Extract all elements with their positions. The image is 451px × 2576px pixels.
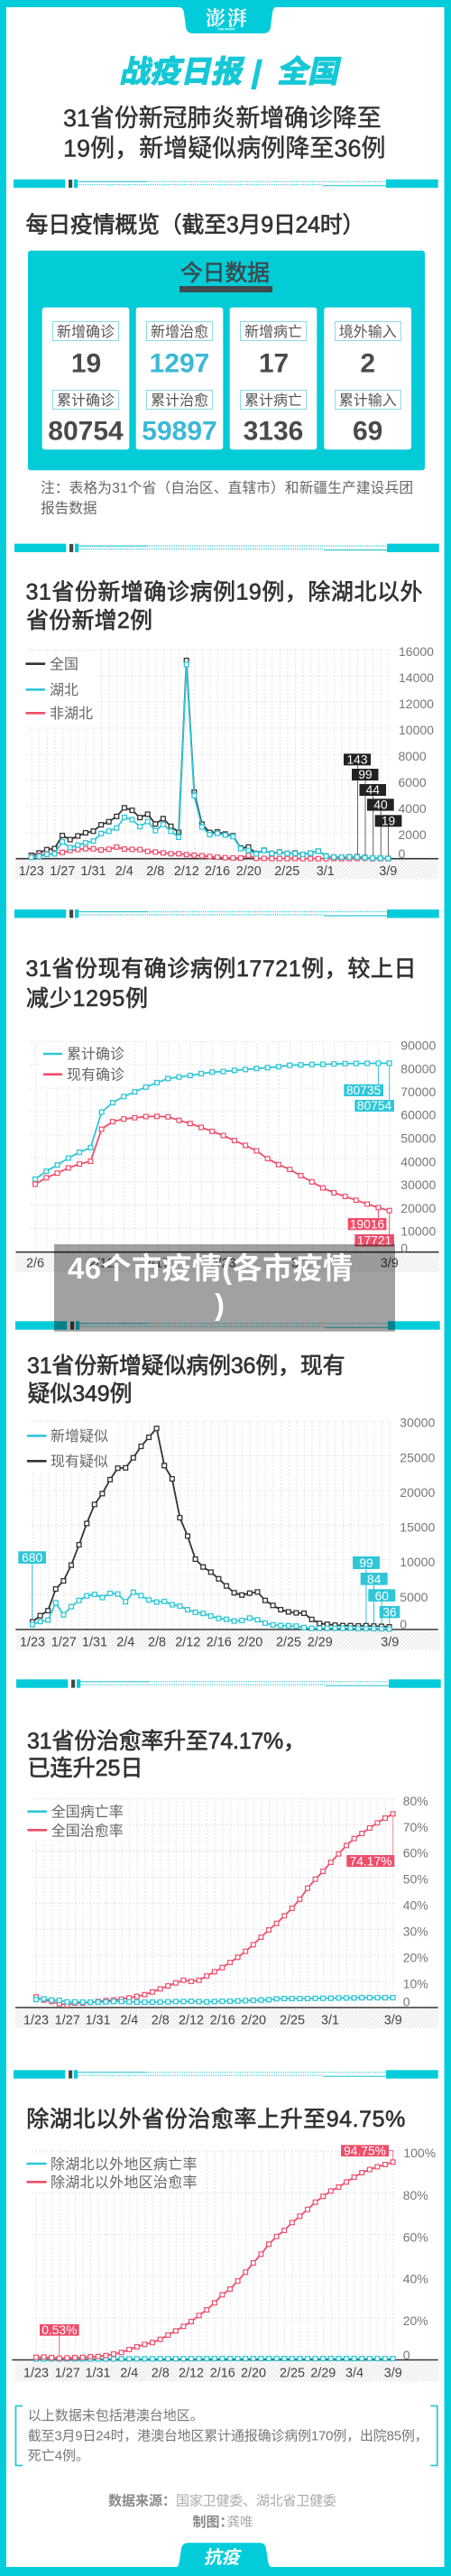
card: confirmed: 19 [71,348,101,379]
y axis labels: 70000 [400,1085,436,1099]
y axis labels: 25000 [400,1451,435,1465]
heading: suspected [27,1353,345,1407]
value tags [18,1551,400,1620]
y axis labels: 20% [403,2313,428,2328]
value tags [344,752,401,828]
value tags: 36 [382,1606,397,1620]
legend: 除湖北以外地区病亡率 [51,2156,197,2173]
card: deaths: 累计病亡 [244,392,302,409]
x axis labels: 2/29 [308,1635,333,1649]
legend: 除湖北以外地区治愈率 [51,2174,197,2191]
y axis labels: 14000 [399,670,434,685]
x axis labels [26,1256,399,1270]
chart: national recovery rate [15,1794,438,2028]
source credits: 龚唯 [227,2515,253,2530]
card: imported: 69 [353,416,382,446]
value tags: 94.75% [344,2144,386,2158]
leader line [392,1814,394,1855]
x axis labels [23,2366,402,2380]
subtitle [63,105,386,162]
bracketed note: 以上数据未包括港澳台地区。 [28,2408,204,2424]
heading: recovery rate: 已连升25日 [27,1756,143,1781]
x axis labels: 1/27 [50,864,75,879]
y axis labels [400,1416,435,1631]
heading: existing confirmed [25,956,417,1011]
heading: recovery rate: 31省份治愈率升至74.17%， [27,1729,306,1754]
card: imported: 累计输入 [339,392,397,409]
leader lines [60,2151,393,2359]
value tags: 44 [366,783,380,797]
x axis labels: 2/16 [207,1635,232,1649]
y axis labels: 5000 [400,1590,428,1604]
x axis labels: 1/27 [55,2014,80,2028]
heading: existing confirmed: 31省份现有确诊病例17721例，较上日 [25,956,417,982]
y axis labels: 0 [400,1617,407,1631]
y axis labels: 8000 [399,749,427,763]
divider [14,544,439,552]
x axis labels: 2/20 [236,864,262,879]
y axis labels: 0 [400,1241,408,1255]
y axis labels: 20% [403,1951,428,1965]
x axis labels: 2/12 [179,2014,204,2028]
leader lines [32,1564,390,1629]
divider [14,180,438,188]
value tags: 99 [359,1556,373,1570]
source credits: 国家卫健委、湖北省卫健委 [176,2494,336,2508]
x axis labels: 2/16 [210,2366,235,2380]
card: cured [136,308,223,449]
y axis labels: 0 [403,2348,410,2362]
overlay banner: 46个市疫情(各市疫情 [68,1251,353,1285]
heading: new confirmed [25,579,422,633]
y axis labels [403,2146,436,2362]
x axis labels: 1/31 [85,2366,111,2380]
value tags [40,2144,389,2337]
x axis labels: 2/25 [280,2366,305,2380]
heading underline [179,286,272,292]
overlay banner: ) [215,1288,225,1321]
heading: existing confirmed: 减少1295例 [26,986,148,1011]
bracketed note: 死亡4例。 [28,2449,89,2463]
card: imported: 2 [360,348,375,379]
y axis labels: 2000 [399,827,427,842]
x axis [15,2007,438,2008]
x axis labels: 1/27 [55,2366,80,2380]
y axis labels: 30% [403,1925,428,1939]
x axis labels: 3/1 [321,2014,339,2028]
x axis labels: 2/12 [179,2366,204,2380]
hatch band [15,1253,439,1272]
panel: today's data [28,251,425,470]
y axis labels [400,1039,436,1255]
y axis labels: 60% [403,2230,428,2244]
y axis labels: 20000 [400,1201,436,1215]
divider [15,1321,440,1330]
y axis labels: 100% [403,2146,436,2160]
card: imported [324,308,411,449]
x axis labels: 2/6 [26,1256,44,1270]
x axis labels: 2/12 [175,1635,200,1649]
x axis labels: 3/1 [317,864,335,879]
series lines [36,2162,393,2359]
header tab with logo: THE PAPER [217,27,235,31]
heading: new confirmed: 省份新增2例 [26,608,152,633]
legend: 全国治愈率 [51,1823,124,1839]
chart: suspected cases [15,1416,440,1650]
x axis labels: 2/20 [241,2366,266,2380]
series lines [32,660,388,859]
heading: recovery rate [27,1729,306,1781]
series lines [36,1814,393,2005]
hatch band [15,860,438,879]
x axis labels: 2/8 [146,864,164,879]
value tags: 80754 [357,1099,392,1113]
x axis labels: 2/8 [152,2366,170,2380]
card: confirmed [42,308,129,449]
legend: 现有疑似 [51,1454,108,1470]
x axis labels: 2/4 [115,864,133,879]
title: 全国 [275,55,344,89]
x axis labels: 2/23 [211,1256,236,1270]
series lines [35,1063,390,1211]
footer tab [176,2543,272,2568]
title: 战疫日报 [117,55,247,89]
x axis [16,1251,438,1253]
value tags: 680 [22,1551,43,1565]
heading: outside Hubei recovery: 除湖北以外省份治愈率上升至94.75% [26,2107,405,2132]
x axis labels: 1/31 [85,2014,111,2028]
x axis labels: 2/12 [174,864,199,879]
legend: 现有确诊 [67,1066,124,1083]
y axis labels: 15000 [400,1519,435,1534]
y axis labels: 10000 [399,723,434,737]
y axis labels: 70% [403,1820,428,1834]
value tags: 0.53% [41,2323,77,2337]
legend: 累计确诊 [67,1047,124,1063]
series lines [32,1428,390,1629]
value tags: 60 [375,1589,389,1602]
value tags: 99 [358,768,373,781]
value tags: 17721 [357,1234,391,1247]
x axis labels: 2/25 [274,864,299,879]
y axis labels: 60000 [400,1108,436,1122]
card: confirmed: 累计确诊 [57,392,115,409]
heading: new confirmed: 31省份新增确诊病例19例，除湖北以外 [25,579,422,605]
bracketed note: 截至3月9日24时，港澳台地区累计通报确诊病例170例，出院85例， [28,2427,428,2443]
leader lines [357,765,388,858]
x axis labels: 2/20 [241,2014,266,2028]
legend: 全国病亡率 [51,1805,124,1821]
x axis labels: 2/4 [120,2014,138,2028]
chart: new confirmed cases [15,644,438,879]
x axis labels: 1/27 [51,1635,77,1649]
card: deaths [230,308,317,449]
x axis labels: 1/23 [20,1635,45,1649]
x axis [16,858,438,860]
hatch band [16,1631,440,1650]
x axis labels: 1/23 [19,864,44,879]
value tags [344,1084,394,1247]
panel heading: 今日数据 [180,261,270,286]
title: | [249,55,265,89]
table note: 报告数据 [41,500,97,516]
y axis labels: 12000 [399,697,434,711]
overlay banner [54,1244,395,1332]
header tab with logo [179,4,276,33]
y axis labels [403,1794,428,2008]
card: deaths: 17 [259,348,289,379]
y axis labels: 20000 [400,1485,435,1500]
x axis labels: 1/31 [80,864,106,879]
heading: suspected: 31省份新增疑似病例36例，现有 [27,1353,345,1379]
divider [14,909,439,918]
legend: 非湖北 [50,706,93,722]
x axis labels: 2/8 [152,2014,170,2028]
y axis labels: 50% [403,1872,428,1887]
x axis labels: 3/4 [345,2366,364,2380]
x axis [15,1629,438,1630]
chart: outside Hubei recovery rate [12,2144,439,2381]
y axis labels [399,644,434,861]
y axis labels: 10% [403,1977,428,1991]
footer tab: 抗疫 [203,2546,243,2568]
table note: 注：表格为31个省（自治区、直辖市）和新疆生产建设兵团 [41,480,413,496]
x axis labels: 2/4 [116,1635,134,1649]
x axis labels: 2/8 [148,1635,166,1649]
x axis labels: 1/23 [23,2014,49,2028]
divider [16,1679,441,1688]
x axis labels: 3/9 [381,1635,399,1649]
x axis labels: 2/17 [144,1256,170,1270]
card: imported: 境外输入 [339,323,397,340]
x axis labels: 3/1 [291,1256,309,1270]
value tags: 84 [367,1573,382,1586]
value tags: 143 [346,752,368,767]
y axis labels: 40000 [400,1154,436,1168]
leader lines [378,1064,390,1100]
card: confirmed: 新增确诊 [57,324,115,340]
x axis labels [23,2014,402,2028]
subtitle: 31省份新冠肺炎新增确诊降至 [63,105,382,132]
y axis labels: 6000 [399,775,427,789]
hatch band [15,2009,438,2028]
y axis labels: 60% [403,1846,428,1860]
card: deaths: 3136 [244,416,303,446]
divider [14,2070,438,2079]
x axis labels: 3/9 [384,2014,402,2028]
source credits: 制图： [193,2515,234,2530]
x axis labels: 2/25 [276,1635,301,1649]
x axis labels: 3/9 [384,2366,402,2380]
legend [24,651,97,727]
legend [41,1043,128,1085]
source credits [108,2492,336,2530]
x axis labels [20,1635,399,1649]
y axis labels: 30000 [400,1416,435,1430]
header tab with logo: 澎湃 [206,4,247,32]
y axis labels: 10000 [400,1224,436,1239]
x axis labels: 2/12 [89,1256,115,1270]
y axis labels: 4000 [399,801,427,816]
y axis labels: 0 [403,1994,410,2008]
table note [41,480,413,516]
legend [25,1423,112,1473]
source credits: 数据来源： [108,2492,176,2508]
legend [24,2153,200,2193]
x axis labels: 2/16 [205,864,230,879]
legend: 新增疑似 [51,1428,108,1445]
x axis [12,2359,438,2360]
card: cured: 59897 [142,416,217,446]
subtitle: 19例，新增疑似病例降至36例 [63,135,386,162]
y axis labels: 30000 [400,1177,436,1192]
x axis labels: 3/9 [379,864,397,879]
y axis labels: 16000 [399,644,434,659]
heading: suspected: 疑似349例 [27,1381,132,1407]
value tags: 19016 [350,1217,385,1231]
x axis labels: 2/29 [310,2366,336,2380]
legend: 湖北 [50,682,78,698]
x axis labels: 2/4 [120,2366,138,2380]
x axis labels: 2/25 [280,2014,305,2028]
card: cured: 新增治愈 [151,324,208,340]
legend [25,1800,127,1841]
legend: 全国 [50,657,78,673]
chart: existing confirmed cases [15,1039,439,1272]
x axis labels: 1/23 [23,2366,49,2380]
y axis labels: 90000 [400,1039,436,1053]
x axis labels: 3/9 [381,1256,399,1270]
section heading: daily overview: 每日疫情概览（截至3月9日24时） [25,213,364,238]
y axis labels: 40% [403,1898,428,1913]
card: cured: 累计治愈 [151,392,208,409]
y axis labels: 80% [403,2188,428,2202]
card: cured: 1297 [150,348,209,379]
x axis labels [19,864,397,879]
value tag: 74.17% [350,1855,391,1868]
value tags: 80735 [346,1084,382,1097]
y axis labels: 0 [399,846,406,861]
y axis labels: 40% [403,2272,428,2286]
card: confirmed: 80754 [48,416,124,446]
y axis labels: 80% [403,1794,428,1808]
hatch band [15,2361,439,2381]
value tags: 19 [382,814,395,828]
y axis labels: 80000 [400,1061,436,1076]
value tags: 40 [373,799,388,812]
y axis labels: 10000 [400,1555,435,1569]
x axis labels: 2/16 [210,2014,235,2028]
bracketed note [16,2405,437,2465]
x axis labels: 2/20 [237,1635,262,1649]
y axis labels: 50000 [400,1131,436,1146]
x axis labels: 1/31 [82,1635,107,1649]
card: deaths: 新增病亡 [244,324,302,340]
